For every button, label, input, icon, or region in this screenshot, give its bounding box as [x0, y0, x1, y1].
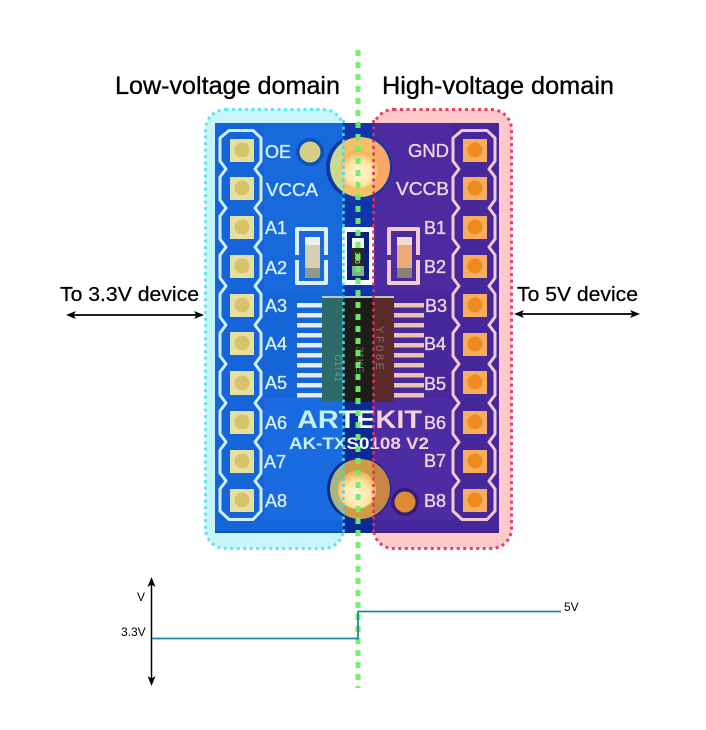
right pin labels: VCCB — [396, 179, 449, 199]
IC chip body: YF08E — [373, 326, 385, 370]
right pin labels: B5 — [424, 374, 446, 394]
right pin labels: B2 — [424, 257, 446, 277]
left domain dotted edge — [342, 120, 345, 536]
resistor centre — [342, 227, 374, 285]
heading: high-voltage domain: High-voltage domain — [382, 72, 614, 100]
panel: high-voltage domain highlight — [374, 110, 512, 548]
capacitor left — [297, 229, 326, 283]
IC pins left — [297, 303, 323, 398]
right pin labels: B6 — [424, 413, 446, 433]
right pin labels: B8 — [424, 491, 446, 511]
board left half — [215, 123, 343, 533]
left pads — [230, 139, 254, 512]
green divider line — [356, 50, 360, 688]
left pin labels: A4 — [265, 334, 287, 354]
left pin labels: A8 — [265, 491, 287, 511]
label: to 3.3V device: To 3.3V device — [60, 284, 199, 306]
board right half — [373, 123, 499, 533]
via B8 — [391, 488, 419, 516]
voltage chart — [121, 579, 579, 684]
mounting hole top — [326, 134, 392, 200]
right pin labels: B4 — [424, 334, 446, 354]
left pin labels: VCCA — [266, 180, 318, 200]
resistor centre: 300 — [353, 252, 360, 264]
mounting hole bottom — [327, 457, 391, 521]
IC pins right — [392, 303, 424, 398]
arrow: right double-headed — [516, 313, 638, 315]
voltage step line — [152, 612, 561, 638]
IC chip body: 31KE — [353, 347, 365, 373]
left pin labels: A7 — [264, 452, 286, 472]
left pin labels: A2 — [265, 258, 287, 278]
left header pin outline — [220, 130, 261, 520]
right pin labels: GND — [408, 141, 449, 161]
panel: circuit board — [215, 123, 499, 533]
voltage axis arrow — [150, 579, 152, 684]
board name: AK-TXS0108 V2 — [289, 435, 429, 453]
right pin labels: B3 — [425, 296, 447, 316]
capacitor right — [389, 229, 418, 283]
board centre band — [343, 123, 373, 533]
axis label V: V — [137, 590, 145, 604]
right domain dotted edge — [372, 120, 375, 536]
brand logo: ARTEKIT — [297, 406, 422, 434]
left pin labels: OE — [265, 142, 291, 162]
left pin labels: A6 — [265, 413, 287, 433]
right pin labels: B1 — [424, 218, 446, 238]
IC chip body: C1T41 — [333, 354, 343, 382]
label 5V: 5V — [564, 600, 579, 614]
right pads — [463, 139, 487, 512]
arrow: left double-headed — [68, 314, 202, 316]
left pin labels — [264, 142, 318, 511]
left pin labels: A3 — [265, 296, 287, 316]
heading: low-voltage domain: Low-voltage domain — [115, 72, 340, 100]
via OE — [296, 138, 324, 166]
right pin labels: B7 — [424, 451, 446, 471]
IC chip body — [322, 296, 394, 402]
panel: low-voltage domain highlight — [206, 110, 344, 548]
right pin labels — [396, 141, 449, 511]
label: to 5V device: To 5V device — [517, 284, 638, 306]
right header pin outline — [453, 130, 495, 520]
label 3.3V: 3.3V — [121, 625, 146, 639]
left pin labels: A1 — [265, 218, 287, 238]
left pin labels: A5 — [265, 373, 287, 393]
